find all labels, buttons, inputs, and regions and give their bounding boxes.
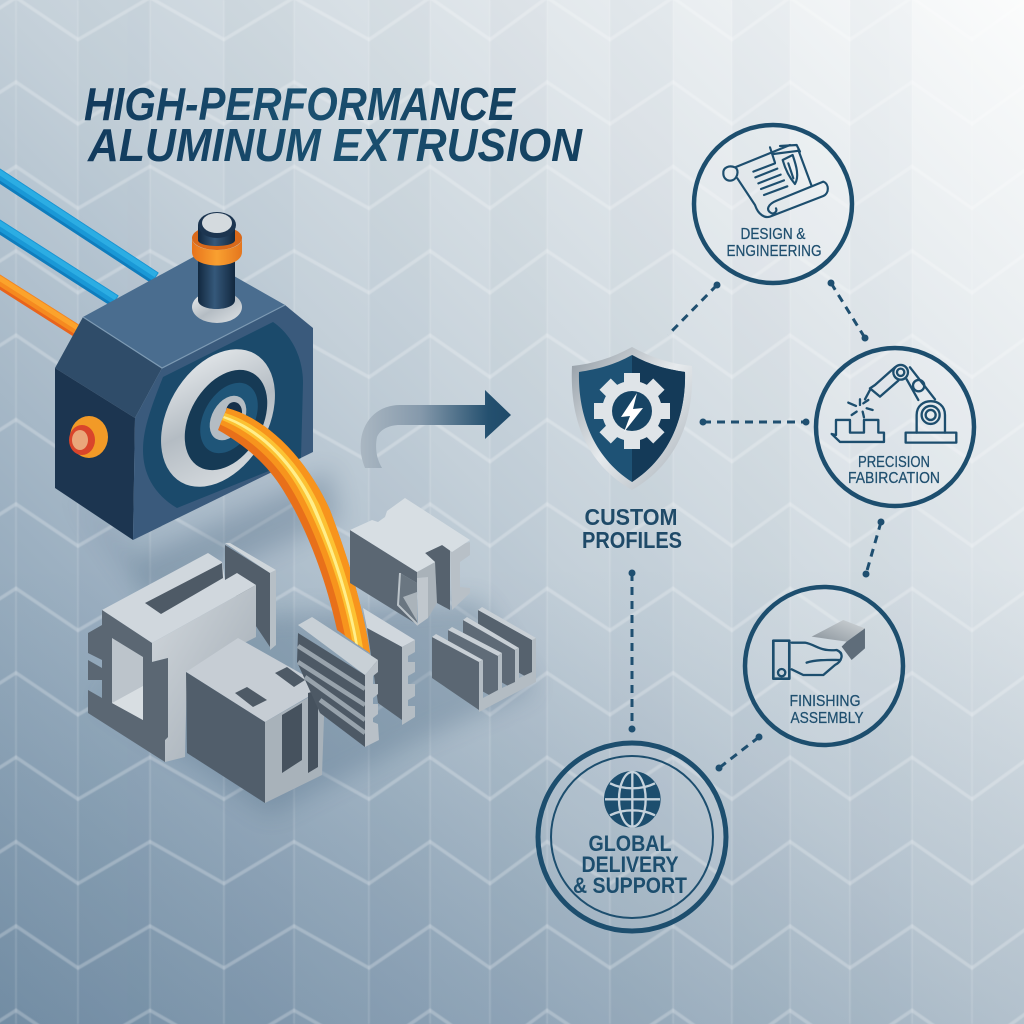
node: global delivery and support: GLOBAL xyxy=(588,831,672,856)
profile: large hollow section xyxy=(88,543,276,762)
profile: front box section xyxy=(186,638,325,803)
icon: globe xyxy=(604,771,661,828)
profile: upper right channel xyxy=(350,498,470,625)
side button xyxy=(69,416,108,458)
shadow under machine xyxy=(70,470,340,600)
connector dots xyxy=(628,280,884,772)
profile: rear finned block xyxy=(363,608,415,725)
node: design and engineering xyxy=(694,125,852,283)
die rings xyxy=(138,329,298,507)
flow arrow xyxy=(361,390,511,468)
label: custom profiles: CUSTOM xyxy=(584,504,678,530)
node: precision fabrication xyxy=(816,348,974,506)
node: precision fabrication: PRECISION xyxy=(858,454,930,471)
title xyxy=(84,78,583,171)
extrusion machine xyxy=(55,212,313,540)
node: global delivery and support: DELIVERY xyxy=(582,852,679,877)
input pipes xyxy=(0,170,156,333)
icon: hand with part xyxy=(773,620,865,679)
title: ALUMINUM EXTRUSION xyxy=(87,119,583,171)
extruded orange tube xyxy=(218,408,370,653)
node: global delivery and support: & SUPPORT xyxy=(573,873,687,898)
icon: gear xyxy=(594,373,670,449)
label: custom profiles xyxy=(582,504,682,553)
node: design and engineering: ENGINEERING xyxy=(726,243,822,260)
top post xyxy=(192,212,242,323)
icon: robot arm xyxy=(832,365,956,443)
shadow under profiles xyxy=(100,600,535,815)
node: finishing assembly: ASSEMBLY xyxy=(790,710,864,727)
node: finishing assembly xyxy=(745,587,903,745)
icon: custom profiles shield xyxy=(572,347,692,490)
title: HIGH-PERFORMANCE xyxy=(84,78,516,130)
profile: right heat sink xyxy=(432,607,536,712)
node: precision fabrication: FABIRCATION xyxy=(848,470,940,487)
connectors xyxy=(632,283,881,768)
node: design and engineering: DESIGN & xyxy=(740,226,806,243)
node: global delivery and support xyxy=(538,743,726,931)
node: finishing assembly: FINISHING xyxy=(790,693,860,710)
label: custom profiles: PROFILES xyxy=(582,527,682,553)
profile: center finned bar xyxy=(297,617,379,747)
icon: blueprint scroll xyxy=(723,145,828,217)
